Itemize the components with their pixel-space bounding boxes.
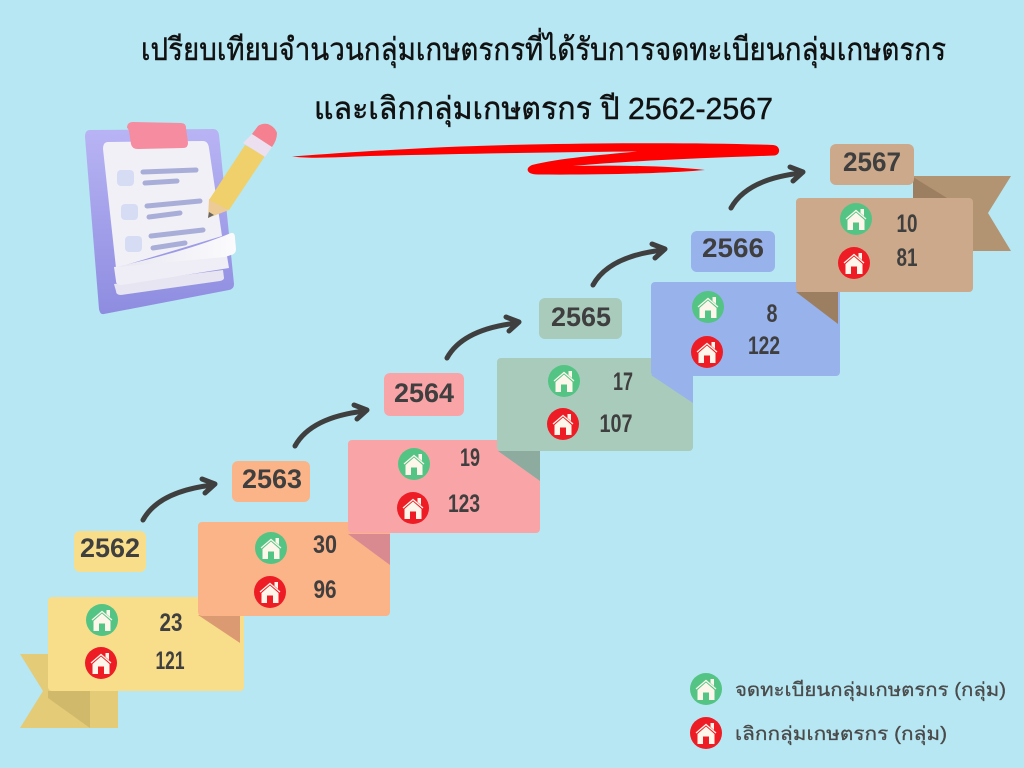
dissolved count: 123	[448, 490, 480, 518]
ribbon tail left	[20, 654, 118, 728]
year label 2563: 2563	[242, 464, 302, 494]
panel: 2563	[198, 461, 390, 616]
title: เปรียบเทียบจำนวนกลุ่มเกษตรกรที่ได้รับการจดทะเบียนกลุ่มเกษตรกร	[141, 28, 946, 69]
arrow 2566 to 2567	[731, 167, 803, 208]
icon: clipboard with pencil	[85, 122, 277, 314]
panel: 2562	[48, 531, 244, 691]
registered icon	[840, 203, 872, 235]
year label 2567: 2567	[843, 147, 901, 177]
registered count: 8	[766, 300, 778, 328]
red underline scribble	[292, 143, 779, 175]
registered icon	[255, 532, 287, 564]
clip	[127, 122, 188, 149]
legend: dissolved	[690, 717, 947, 749]
panel: 2566	[651, 231, 840, 376]
year label 2562	[74, 531, 146, 572]
registered count: 17	[613, 368, 633, 396]
registered icon	[86, 604, 118, 636]
registered icon	[398, 448, 430, 480]
registered icon	[692, 291, 724, 323]
dissolved count: 122	[748, 332, 780, 360]
registered count: 23	[160, 609, 182, 637]
clipboard board	[85, 129, 234, 314]
checklist items	[117, 170, 142, 252]
arrow 2564 to 2565	[447, 317, 519, 358]
top paper	[103, 141, 222, 268]
dissolved icon	[547, 408, 579, 440]
legend: registered: จดทะเบียนกลุ่มเกษตรกร (กลุ่ม)	[735, 679, 1006, 702]
year label 2565	[539, 298, 622, 339]
dissolved count: 81	[896, 244, 918, 272]
year label 2566	[691, 231, 775, 272]
legend	[690, 673, 1006, 749]
dissolved count: 121	[156, 647, 185, 675]
year label 2566: 2566	[702, 233, 764, 263]
year label 2567	[830, 144, 914, 185]
registered count: 19	[460, 444, 480, 472]
arrow 2563 to 2564	[295, 405, 367, 446]
panel: 2564	[348, 373, 540, 533]
dissolved icon	[691, 336, 723, 368]
middle sheet	[114, 256, 229, 285]
registered count: 30	[313, 531, 337, 559]
title: และเลิกกลุ่มเกษตรกร ปี 2562-2567	[314, 91, 773, 128]
arrow 2565 to 2566	[593, 244, 665, 285]
dissolved icon	[838, 247, 870, 279]
dissolved icon	[85, 647, 117, 679]
year label 2563	[232, 461, 310, 502]
arrow 2562 to 2563	[143, 479, 215, 520]
lower sheet	[114, 270, 224, 295]
dissolved count: 107	[600, 410, 632, 438]
legend: registered	[690, 673, 1006, 705]
pencil	[208, 199, 229, 218]
dissolved icon	[397, 492, 429, 524]
ribbon tail right	[913, 176, 1011, 251]
legend: dissolved: เลิกกลุ่มเกษตรกร (กลุ่ม)	[735, 724, 947, 746]
panel: 2565	[497, 298, 693, 451]
year label 2564	[384, 373, 464, 416]
dissolved icon	[254, 576, 286, 608]
registered icon	[548, 365, 580, 397]
registered count: 10	[896, 210, 918, 238]
curled page	[116, 233, 236, 267]
dissolved count: 96	[314, 576, 336, 604]
year label 2565: 2565	[551, 302, 611, 332]
year label 2562: 2562	[80, 533, 140, 563]
panel: 2567	[796, 144, 973, 292]
year label 2564: 2564	[394, 378, 454, 408]
title	[141, 28, 946, 128]
